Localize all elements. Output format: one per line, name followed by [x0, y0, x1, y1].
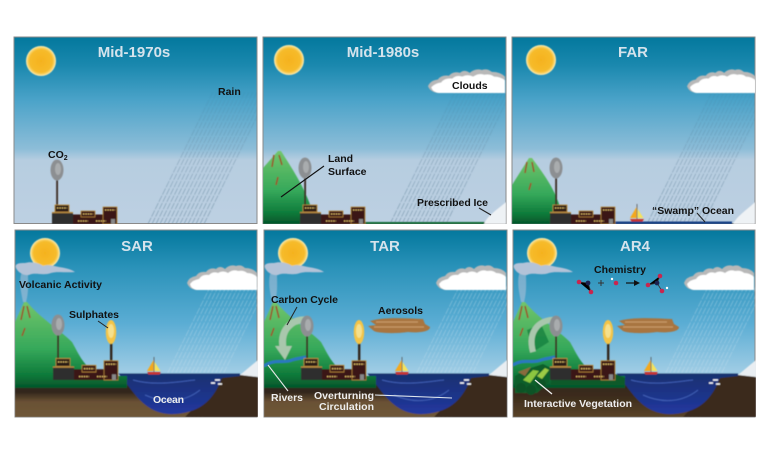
label: land surface	[281, 153, 367, 197]
icon: rain streaks	[390, 92, 511, 224]
icon: factory	[300, 205, 365, 224]
heading: TAR: TAR	[370, 238, 400, 255]
soil	[264, 377, 507, 417]
icon: smoke stack	[50, 160, 64, 207]
label: clouds: Clouds	[452, 80, 488, 92]
icon: volcanic plume	[265, 262, 324, 302]
label: sulphates: Sulphates	[69, 309, 119, 321]
icon: sailboat	[147, 357, 161, 374]
icon: volcanic plume	[514, 262, 573, 302]
label: prescribed ice: Prescribed Ice	[417, 197, 488, 209]
icon: prescribed ice	[484, 202, 506, 224]
icon: rain streaks	[168, 287, 258, 372]
icon: factory	[52, 205, 117, 224]
icon: interactive vegetation	[515, 364, 625, 395]
soil	[15, 384, 191, 417]
mountain	[264, 302, 376, 388]
label: land surface: Land	[328, 153, 353, 165]
forest patches on the slope	[527, 324, 549, 352]
label: chemistry: Chemistry	[594, 264, 646, 276]
icon: cloud	[436, 265, 506, 290]
label: interactive vegetation	[524, 380, 632, 410]
icon: rain streaks	[648, 94, 755, 222]
label: land surface: Surface	[328, 166, 367, 178]
icon: ice	[733, 202, 755, 224]
icon: sun	[526, 45, 556, 75]
icon: sun	[527, 238, 557, 268]
mountain	[512, 158, 562, 224]
icon: smoke stack	[300, 316, 314, 363]
swamp ocean strip	[615, 222, 732, 224]
mountain	[15, 302, 127, 388]
icon: sailboat	[395, 357, 409, 374]
icon: smoke stack	[550, 316, 562, 363]
panel: TAR	[264, 230, 516, 417]
icon: rain streaks	[417, 286, 507, 372]
icon: carbon cycle arrow	[275, 320, 308, 360]
label: volcanic activity: Volcanic Activity	[19, 279, 102, 291]
icon: aerosol cloud	[617, 318, 679, 333]
icon: sun	[30, 238, 60, 268]
label: swamp ocean: “Swamp” Ocean	[652, 205, 734, 217]
heading: FAR: FAR	[618, 44, 648, 61]
heading: Mid-1980s: Mid-1980s	[347, 44, 419, 61]
panel: SAR	[15, 230, 267, 417]
label: rivers	[268, 365, 303, 404]
land surface mountain	[263, 151, 313, 224]
icon: factory	[550, 205, 615, 224]
icon: sulphate flame	[106, 320, 116, 361]
panel: Mid-1980s	[263, 37, 511, 224]
icon: factory	[550, 358, 615, 380]
icon: sailboat	[630, 204, 644, 222]
heading: SAR: SAR	[121, 238, 153, 255]
ocean basin	[367, 360, 507, 417]
label: overturning circulation: Overturning	[314, 390, 374, 402]
label: prescribed ice	[417, 197, 491, 215]
ocean basin	[118, 360, 258, 417]
label: carbon cycle	[271, 294, 338, 325]
label: overturning circulation	[314, 390, 452, 413]
icon: smoke stack	[298, 158, 312, 205]
icon: cloud	[187, 265, 257, 290]
thin land strip	[313, 222, 488, 224]
heading: Mid-1970s: Mid-1970s	[98, 44, 170, 61]
heading: AR4: AR4	[620, 238, 651, 255]
icon: sun	[26, 46, 56, 76]
label: overturning circulation: Circulation	[319, 401, 374, 413]
icon: aerosol cloud	[368, 318, 430, 333]
icon: factory	[53, 358, 118, 380]
icon: carbon cycle arrow	[532, 320, 557, 352]
label: rivers: Rivers	[271, 392, 303, 404]
icon: volcanic plume	[16, 262, 75, 302]
chemistry reaction diagram	[577, 274, 668, 294]
label: sulphates	[69, 309, 119, 328]
icon: sun	[274, 45, 304, 75]
label: interactive vegetation: Interactive Vegetation	[524, 398, 632, 410]
icon: sulphate flame	[354, 320, 364, 361]
panel: Mid-1970s	[14, 37, 269, 224]
label: CO2: 2	[64, 155, 68, 162]
ocean basin	[616, 360, 756, 417]
label: rain: Rain	[218, 86, 241, 98]
icon: smoke stack	[550, 158, 562, 205]
label: CO2: CO	[48, 149, 64, 161]
icon: cloud	[687, 69, 756, 93]
icon: sulphate flame	[603, 320, 613, 361]
label: carbon cycle: Carbon Cycle	[271, 294, 338, 306]
mountain	[513, 302, 625, 388]
icon: rain streaks	[148, 108, 257, 224]
icon: rain streaks	[644, 285, 765, 417]
panel: AR4	[513, 230, 765, 417]
label: aerosols: Aerosols	[378, 305, 423, 317]
icon: smoke stack	[52, 314, 64, 362]
icon: factory	[301, 358, 366, 380]
icon: river	[264, 357, 306, 366]
soil	[513, 377, 756, 417]
icon: cloud	[428, 69, 505, 93]
label: ocean: Ocean	[153, 394, 184, 406]
icon: sailboat	[644, 357, 658, 374]
panel: FAR	[512, 37, 768, 224]
icon: river	[513, 357, 555, 365]
icon: cloud	[684, 265, 754, 290]
icon: sun	[278, 238, 308, 268]
